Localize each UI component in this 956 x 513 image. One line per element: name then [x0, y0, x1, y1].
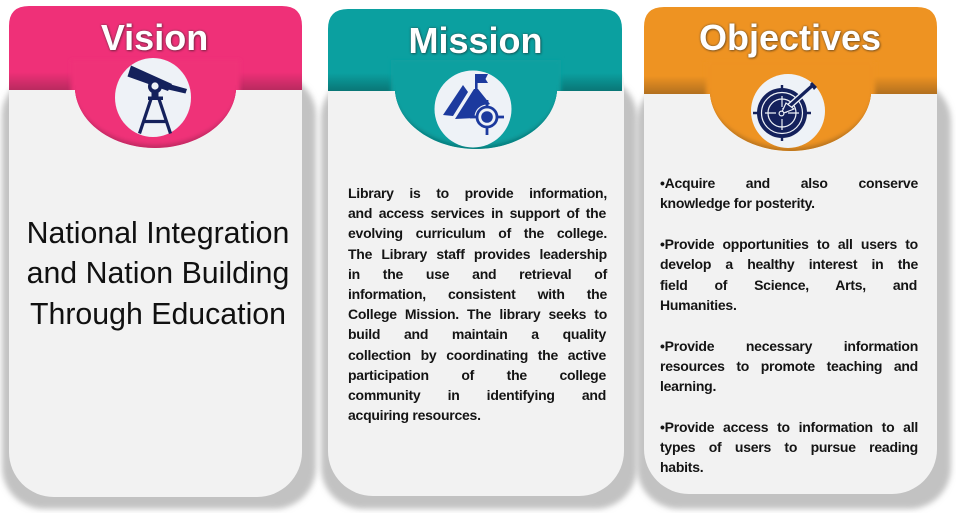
text: objectives list: types of users to pursue reading: [660, 439, 918, 455]
text: mission statement: College Mission. The library seeks to: [348, 306, 607, 322]
text: mission statement: The Library staff provides leadership: [348, 246, 607, 262]
header band with bowl: [644, 7, 937, 151]
text: mission statement: build and maintain a quality: [348, 326, 606, 342]
text: mission statement: evolving curriculum of the college.: [348, 225, 607, 241]
icon: telescope: [115, 58, 191, 137]
text: vision statement: National Integration: [27, 217, 289, 250]
panel card: [644, 40, 937, 494]
text: mission statement: and access services in support of the: [348, 205, 606, 221]
text: vision statement: Through Education: [30, 298, 286, 331]
header band with bowl: [9, 6, 302, 148]
text: mission statement: in the use and retrieval of: [348, 266, 607, 282]
icon: target with arrow: [751, 74, 825, 148]
text: objectives list: develop a healthy interest in the: [660, 256, 918, 272]
text: objectives list: knowledge for posterity.: [660, 195, 815, 211]
text: objectives list: •Provide opportunities to all users to: [660, 236, 918, 252]
text: vision statement: [27, 217, 289, 331]
text: objectives list: resources to promote teaching and: [660, 358, 918, 374]
text: mission statement: acquiring resources.: [348, 407, 481, 423]
panel card: [328, 40, 624, 496]
text: objectives list: Humanities.: [660, 297, 737, 313]
panel shadow: [2, 74, 316, 509]
text: objectives list: •Provide access to information to all: [660, 419, 918, 435]
panel: vision: [0, 6, 318, 512]
text: mission statement: [348, 185, 608, 423]
text: mission statement: collection by coordinating the active: [348, 347, 606, 363]
text: mission statement: participation of the college: [348, 367, 606, 383]
text: objectives list: field of Science, Arts, and: [660, 277, 917, 293]
panel: objectives: [636, 7, 954, 512]
text: objectives list: •Acquire and also conserve: [660, 175, 918, 191]
panel shadow: [637, 80, 951, 509]
panel: mission: [318, 9, 638, 512]
panel card: [9, 40, 302, 497]
text: vision statement: and Nation Building: [27, 257, 289, 290]
text: objectives list: •Provide necessary information: [660, 338, 918, 354]
text: objectives list: habits.: [660, 459, 703, 475]
title: Vision: Vision: [101, 16, 208, 58]
text: mission statement: community in identifying and: [348, 387, 606, 403]
text: mission statement: Library is to provide information,: [348, 185, 607, 201]
text: objectives list: [660, 175, 918, 475]
panel shadow: [321, 76, 637, 509]
title: Mission: Mission: [408, 20, 542, 60]
text: mission statement: information, consistent with the: [348, 286, 607, 302]
title: Objectives: Objectives: [699, 16, 881, 58]
text: objectives list: learning.: [660, 378, 716, 394]
icon: mountain flag and target: [434, 70, 512, 148]
header band with bowl: [328, 9, 622, 149]
